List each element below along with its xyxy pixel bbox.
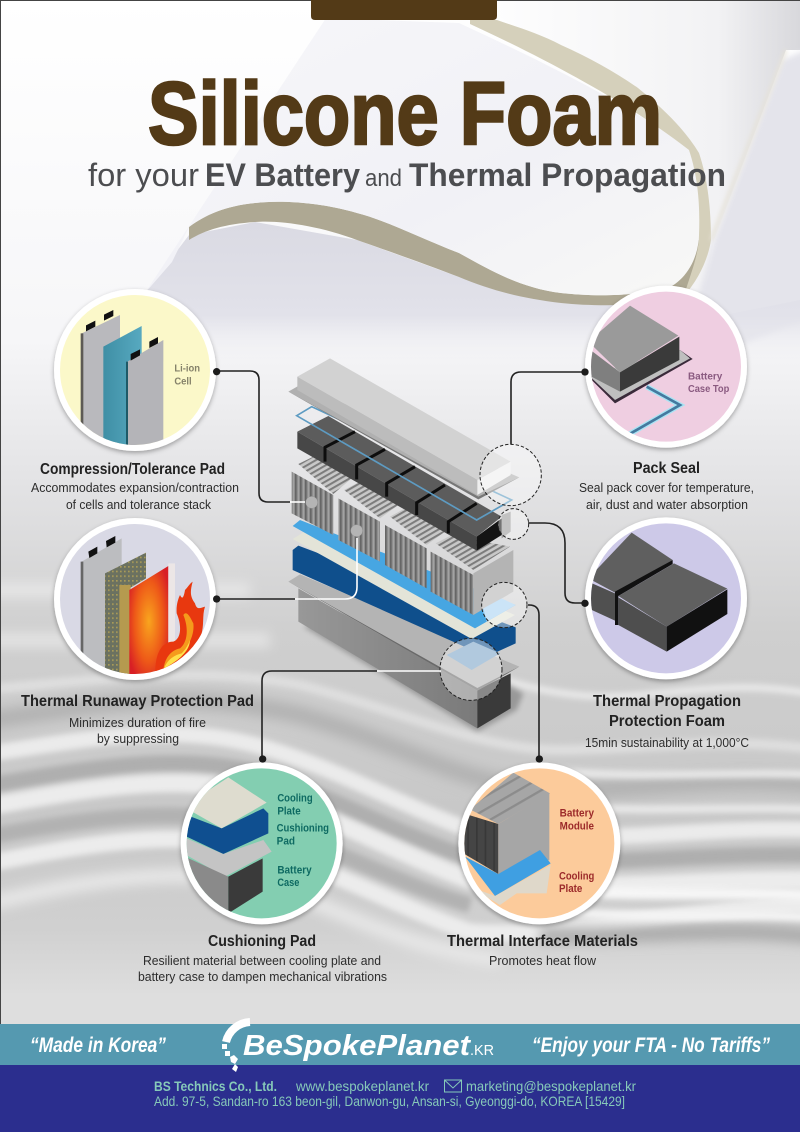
text: thermal propagation protection foam: Protection Foam: [609, 713, 725, 730]
text: thermal runaway protection pad: by suppressing: [97, 731, 179, 746]
exploded battery pack diagram: [288, 358, 541, 732]
battery modules: [292, 457, 513, 615]
dashed detail circles: [440, 444, 541, 700]
text: thermal interface materials: [447, 933, 638, 968]
battery case top: [288, 358, 519, 499]
text: compression/tolerance pad: of cells and tolerance stack: [66, 497, 211, 512]
circle: thermal propagation foam: [581, 517, 747, 679]
text: pack seal: Seal pack cover for temperature,: [579, 480, 754, 495]
labels: TIM circle: Cooling: [559, 870, 594, 882]
text: thermal interface materials: Promotes heat flow: [489, 953, 597, 968]
labels: TIM circle: Battery: [560, 808, 595, 820]
label: battery case top: Battery: [688, 371, 723, 382]
thermal interface material: [293, 520, 516, 628]
labels: cushioning circle: Plate: [277, 805, 301, 817]
text: cushioning pad: [138, 933, 387, 984]
subtitle: EV Battery: [205, 157, 360, 193]
labels: cushioning circle: Battery: [277, 864, 312, 876]
text: cushioning pad: Resilient material between cooling plate and: [143, 953, 381, 968]
text: pack seal: Pack Seal: [633, 460, 700, 477]
circle: thermal runaway pad: [54, 518, 220, 680]
subtitle: [88, 157, 726, 193]
labels: cushioning circle: [277, 793, 329, 889]
footer teal band: [0, 1024, 800, 1065]
labels: cushioning circle: Cushioning: [277, 823, 329, 835]
label: battery case top: [688, 371, 729, 395]
icon: envelope: [444, 1080, 462, 1092]
text: cushioning pad: Cushioning Pad: [208, 933, 316, 950]
logo: BeSpokePlanet.KR: BeSpokePlanet: [243, 1030, 471, 1062]
text: thermal runaway protection pad: [21, 693, 254, 746]
thermal propagation foam blocks: [297, 416, 511, 551]
top tab: [311, 0, 497, 20]
logo: BeSpokePlanet.KR: .KR: [470, 1042, 494, 1059]
logo: BeSpokePlanet.KR: [222, 1022, 494, 1072]
text: thermal interface materials: Thermal Interface Materials: [447, 933, 638, 950]
background: silicone foam sheet: [120, 0, 800, 365]
label: Li-ion Cell: [174, 364, 200, 387]
labels: cushioning circle: Case: [277, 877, 299, 889]
footer contact details: BS Technics Co., Ltd.: [154, 1078, 277, 1094]
circle: thermal interface materials: [458, 755, 620, 924]
text: cushioning pad: battery case to dampen mechanical vibrations: [138, 969, 387, 984]
circle: cushioning pad: [181, 755, 343, 924]
text: thermal runaway protection pad: Thermal Runaway Protection Pad: [21, 693, 254, 710]
text: compression/tolerance pad: [31, 461, 239, 512]
footer contact details: [154, 1078, 636, 1109]
battery case bottom: [288, 574, 523, 732]
footer contact details: marketing@bespokeplanet.kr: [466, 1078, 636, 1094]
circle: compression pad: [54, 289, 220, 453]
slogan: made in Korea: “Made in Korea”: [30, 1034, 166, 1057]
footer contact details: Add. 97-5, Sandan-ro 163 beon-gil, Danwon-gu, Ansan-si, Gyeonggi-do, KOREA [15429]: [154, 1093, 625, 1109]
title: Silicone Foam: [148, 63, 662, 163]
detail markers: [306, 496, 363, 537]
label: Li-ion Cell: Li-ion: [174, 364, 200, 375]
labels: TIM circle: Plate: [559, 883, 582, 895]
subtitle: for your: [88, 157, 199, 193]
labels: TIM circle: [559, 808, 595, 895]
labels: cushioning circle: Pad: [277, 835, 295, 847]
text: thermal runaway protection pad: Minimizes duration of fire: [69, 715, 206, 730]
connector lines: [216, 371, 585, 759]
footer contact details: www.bespokeplanet.kr: [295, 1078, 429, 1094]
subtitle: Thermal Propagation: [409, 157, 726, 193]
text: pack seal: air, dust and water absorption: [586, 497, 748, 512]
background: flowing waves: [0, 590, 800, 960]
text: thermal propagation protection foam: 15min sustainability at 1,000°C: [585, 735, 749, 750]
subtitle: and: [365, 165, 402, 192]
text: compression/tolerance pad: Compression/Tolerance Pad: [40, 461, 225, 478]
cushioning pad: [293, 546, 516, 657]
text: compression/tolerance pad: Accommodates expansion/contraction: [31, 480, 239, 495]
label: battery case top: Case Top: [688, 384, 729, 395]
footer blue band: [0, 1065, 800, 1132]
highlight: cushioning area: [447, 642, 500, 670]
circle: pack seal: [581, 286, 747, 448]
cooling plate: [293, 528, 515, 639]
text: pack seal: [579, 460, 754, 512]
highlight: pad on cooling plate: [483, 598, 516, 622]
labels: TIM circle: Module: [560, 820, 594, 832]
seal gasket frame: [297, 407, 512, 520]
labels: cushioning circle: Cooling: [277, 793, 313, 805]
label: Li-ion Cell: Cell: [174, 376, 192, 387]
text: thermal propagation protection foam: [585, 693, 749, 750]
text: thermal propagation protection foam: Thermal Propagation: [593, 693, 741, 710]
